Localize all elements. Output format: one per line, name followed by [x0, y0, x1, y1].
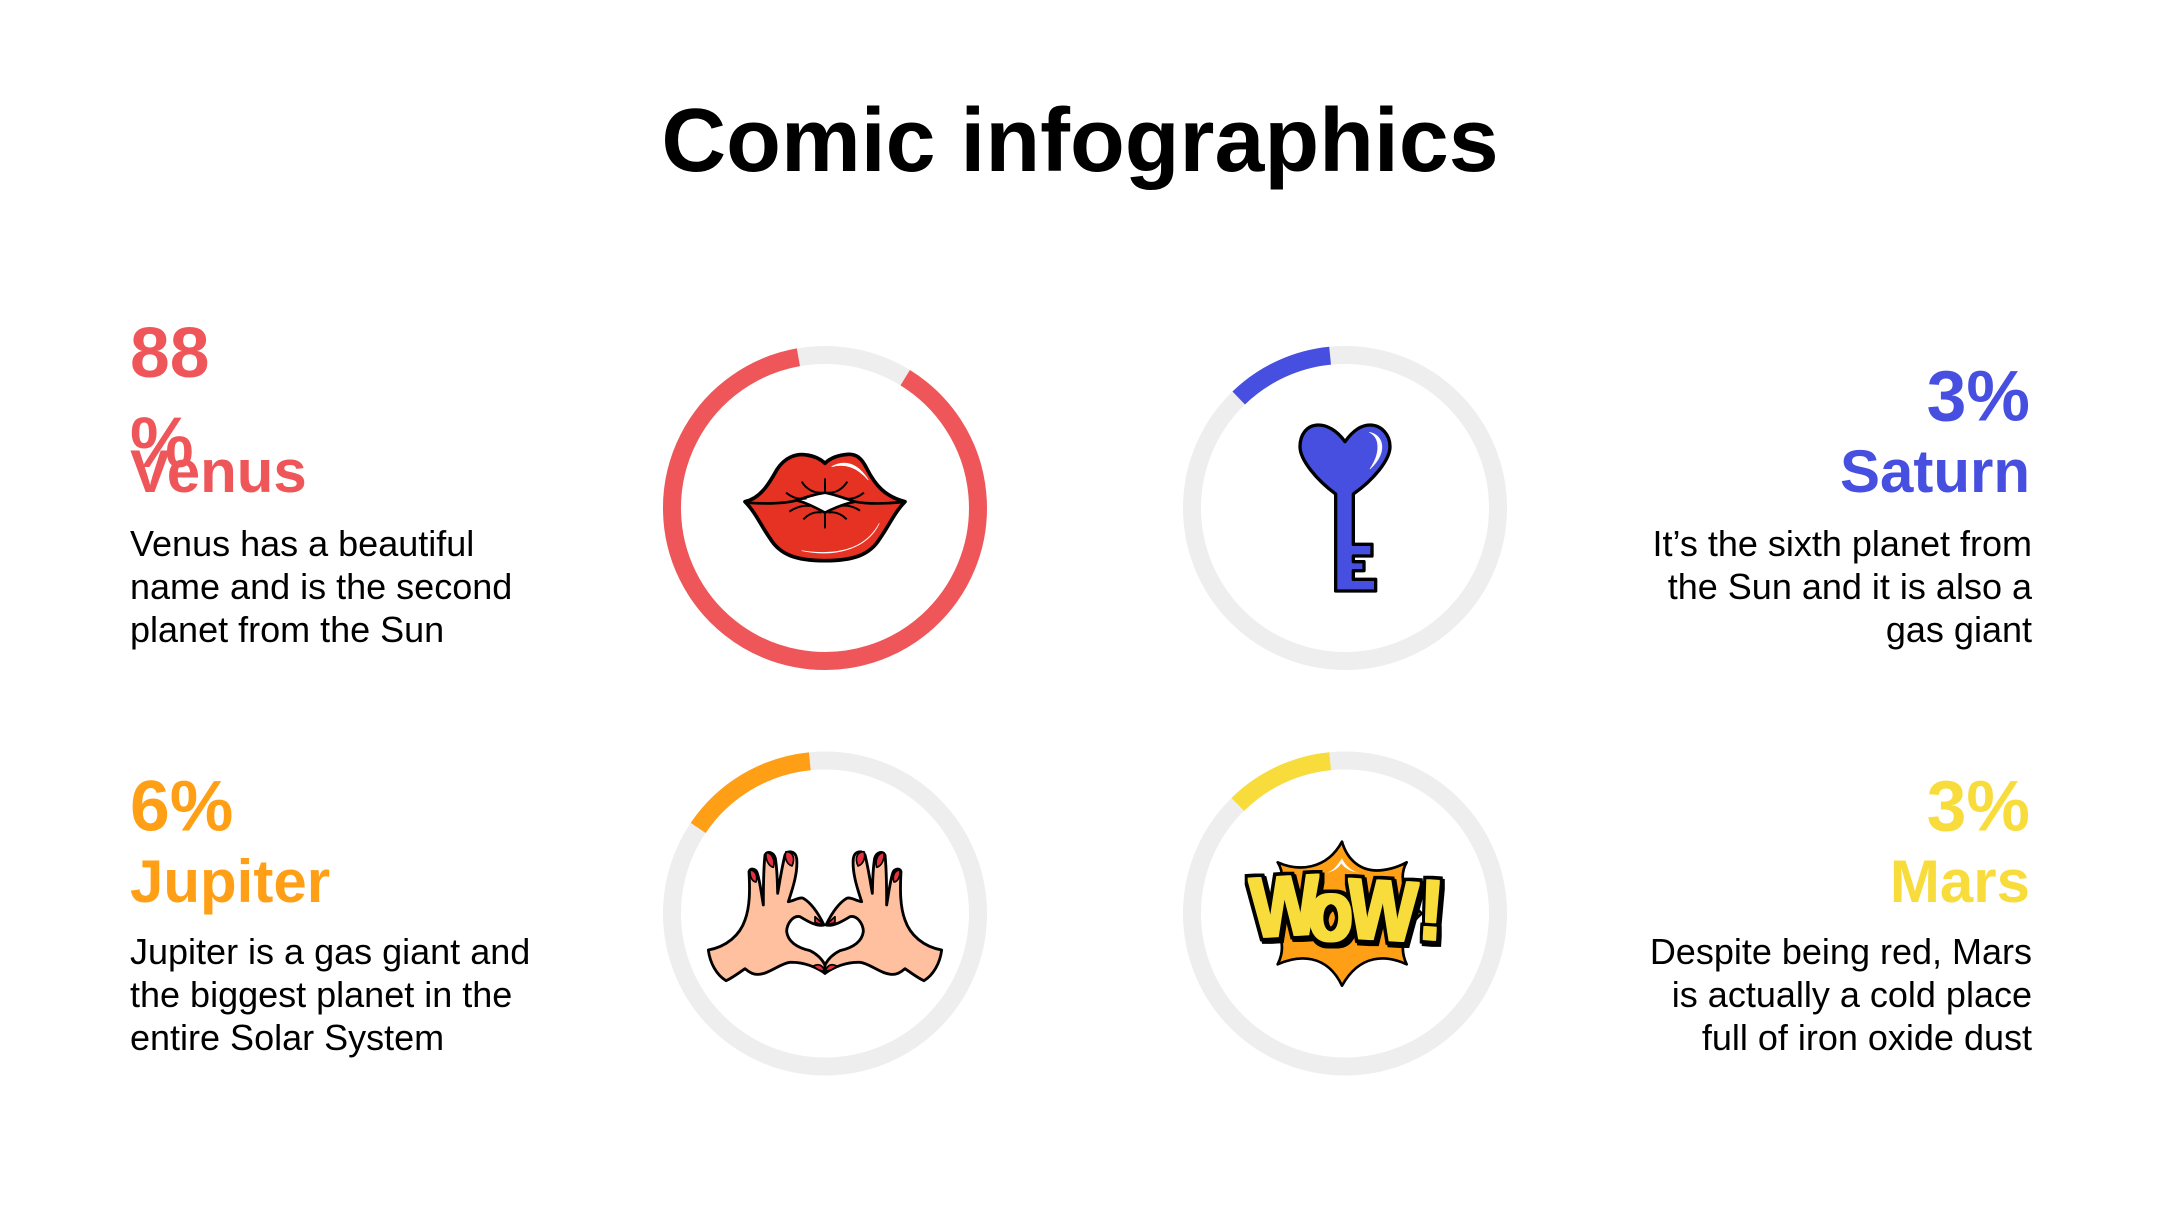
- Venus description: planet from the Sun: [130, 609, 444, 650]
- donut chart: Saturn: [1192, 355, 1498, 661]
- Saturn description: the Sun and it is also a: [1668, 566, 2033, 607]
- Mars description: full of iron oxide dust: [1702, 1017, 2032, 1058]
- Venus percentage: 88: [130, 313, 210, 393]
- donut chart: Venus: [672, 355, 978, 661]
- Venus description: name and is the second: [130, 566, 512, 607]
- Jupiter percentage: 6%: [130, 766, 233, 846]
- Jupiter description: entire Solar System: [130, 1017, 444, 1058]
- icon: lips: [745, 454, 905, 561]
- panel: Mars text: [1650, 766, 2032, 1058]
- icon: heart key: [1300, 425, 1390, 591]
- Mars percentage: 3%: [1927, 766, 2030, 846]
- Jupiter description: the biggest planet in the: [130, 974, 512, 1015]
- icon: WOW comic burst: [1248, 842, 1446, 986]
- Mars description: Despite being red, Mars: [1650, 931, 2032, 972]
- Saturn heading: Saturn: [1840, 438, 2030, 505]
- Saturn percentage: 3%: [1927, 356, 2030, 436]
- Mars description: is actually a cold place: [1672, 974, 2032, 1015]
- Venus description: Venus has a beautiful: [130, 523, 474, 564]
- Saturn description: It’s the sixth planet from: [1652, 523, 2032, 564]
- icon: heart-shaped hands: [708, 852, 942, 981]
- Jupiter description: Jupiter is a gas giant and: [130, 931, 530, 972]
- title: Comic infographics: [661, 91, 1499, 191]
- panel: Venus text: [130, 313, 512, 650]
- donut chart: Mars: [1192, 760, 1498, 1066]
- Jupiter heading: Jupiter: [130, 848, 330, 915]
- WoW! lettering: WoW!: [1248, 856, 1446, 959]
- panel: Saturn text: [1652, 356, 2033, 650]
- Mars heading: Mars: [1890, 848, 2030, 915]
- Venus percentage: %: [130, 403, 194, 483]
- panel: Jupiter text: [130, 766, 530, 1058]
- donut chart: Jupiter: [672, 760, 978, 1066]
- Venus heading: Venus: [130, 438, 307, 505]
- Saturn description: gas giant: [1886, 609, 2032, 650]
